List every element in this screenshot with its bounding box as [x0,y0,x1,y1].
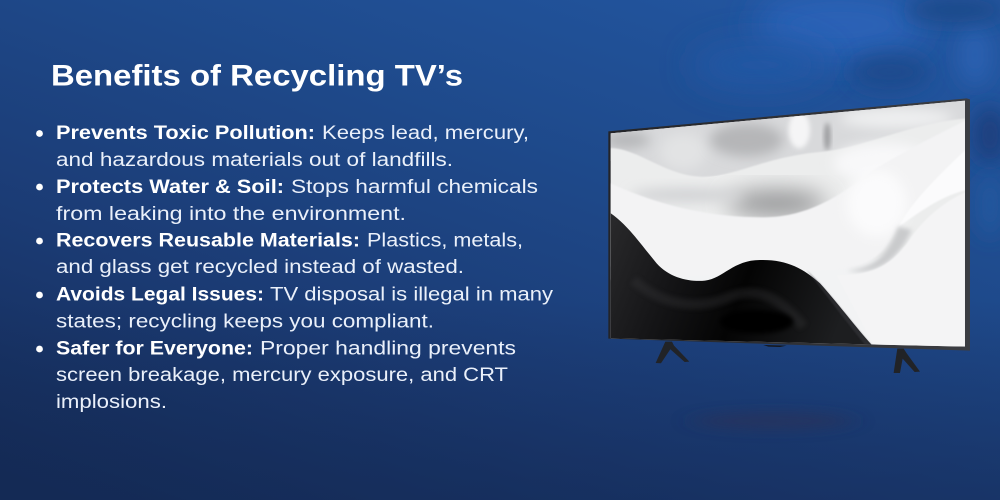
tv stand right [894,349,920,373]
bullet: Recovers Reusable Materials: Recovers Reusable Materials: [56,230,360,252]
bullet: Recovers Reusable Materials: Plastics, metals, [367,230,523,252]
bullet: Prevents Toxic Pollution: and hazardous materials out of landfills. [56,149,453,171]
bullet: Avoids Legal Issues [36,284,553,332]
bullet: Protects Water & Soil: Protects Water & Soil: [56,176,284,198]
bullet: Avoids Legal Issues: TV disposal is illegal in many [270,284,553,306]
bullet: Prevents Toxic Pollution: Prevents Toxic Pollution: [56,122,315,144]
right side fold [902,150,965,223]
black wave area [608,212,873,347]
bullet: Protects Water & Soil: Stops harmful chemicals [291,176,538,198]
lower wave band [607,120,967,280]
bullet list [36,122,553,413]
television [603,97,970,373]
bullet: Avoids Legal Issues: states; recycling keeps you compliant. [56,310,434,332]
title: Benefits of Recycling TV’s [51,60,463,92]
bullet: Recovers Reusable Materials: and glass get recycled instead of wasted. [56,256,464,278]
bullet: Protects Water & Soil: from leaking into the environment. [56,203,406,225]
tv stand left [656,342,689,363]
bullet: Recovers Reusable Materials [36,230,523,278]
bullet: Protects Water & Soil [36,176,538,225]
floor shadow [693,412,853,430]
bullet: Safer for Everyone: Safer for Everyone: [56,338,253,360]
bullet: Prevents Toxic Pollution [36,122,529,171]
tv screen [603,97,970,350]
tv frame [608,98,970,351]
bullet: Avoids Legal Issues: Avoids Legal Issues: [56,284,264,306]
upper wave [607,118,967,267]
bullet: Safer for Everyone: screen breakage, mercury exposure, and CRT [56,364,508,386]
bullet: Safer for Everyone: Proper handling prevents [260,338,516,360]
bullet: Prevents Toxic Pollution: Keeps lead, mercury, [322,122,529,144]
bullet: Safer for Everyone [36,338,516,413]
bullet: Safer for Everyone: implosions. [56,391,167,413]
